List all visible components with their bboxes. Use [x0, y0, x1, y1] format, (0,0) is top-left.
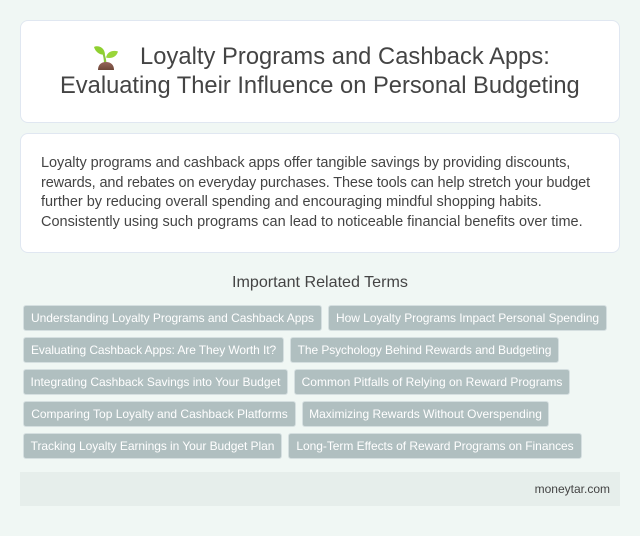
tag	[302, 401, 549, 427]
related terms heading: Important Related Terms	[232, 273, 408, 291]
icon: seedling	[94, 46, 118, 70]
tag: Understanding Loyalty Programs and Cashback Apps	[31, 311, 314, 325]
tag: Common Pitfalls of Relying on Reward Programs	[302, 375, 562, 389]
tag	[23, 369, 288, 395]
tag	[288, 433, 582, 459]
description text	[41, 155, 590, 230]
tag	[290, 337, 559, 363]
tag	[23, 337, 284, 363]
footer bar	[20, 472, 620, 506]
description text: rewards, and rebates on everyday purchases. These tools can help stretch your budget	[41, 175, 590, 191]
related terms tags	[23, 305, 607, 459]
tag: Long-Term Effects of Reward Programs on Finances	[296, 439, 574, 453]
tag	[294, 369, 570, 395]
tag	[23, 305, 322, 331]
tag: Comparing Top Loyalty and Cashback Platforms	[31, 407, 288, 421]
title	[60, 44, 580, 99]
description panel	[20, 133, 620, 253]
tag	[328, 305, 607, 331]
description text: further by reducing overall spending and encouraging mindful shopping habits.	[41, 194, 542, 210]
tag: Integrating Cashback Savings into Your Budget	[31, 375, 280, 389]
tag: How Loyalty Programs Impact Personal Spending	[336, 311, 599, 325]
description text: Consistently using such programs can lead to noticeable financial benefits over time.	[41, 214, 583, 230]
footer site name: moneytar.com	[535, 482, 610, 496]
tag: Maximizing Rewards Without Overspending	[309, 407, 542, 421]
title: Loyalty Programs and Cashback Apps:	[140, 44, 550, 70]
tag: The Psychology Behind Rewards and Budgeting	[298, 343, 551, 357]
description text: Loyalty programs and cashback apps offer tangible savings by providing discounts,	[41, 155, 570, 171]
title panel	[20, 20, 620, 123]
title: Evaluating Their Influence on Personal Budgeting	[60, 73, 580, 99]
tag	[23, 433, 282, 459]
tag: Tracking Loyalty Earnings in Your Budget Plan	[31, 439, 274, 453]
tag: Evaluating Cashback Apps: Are They Worth It?	[31, 343, 276, 357]
tag	[23, 401, 296, 427]
